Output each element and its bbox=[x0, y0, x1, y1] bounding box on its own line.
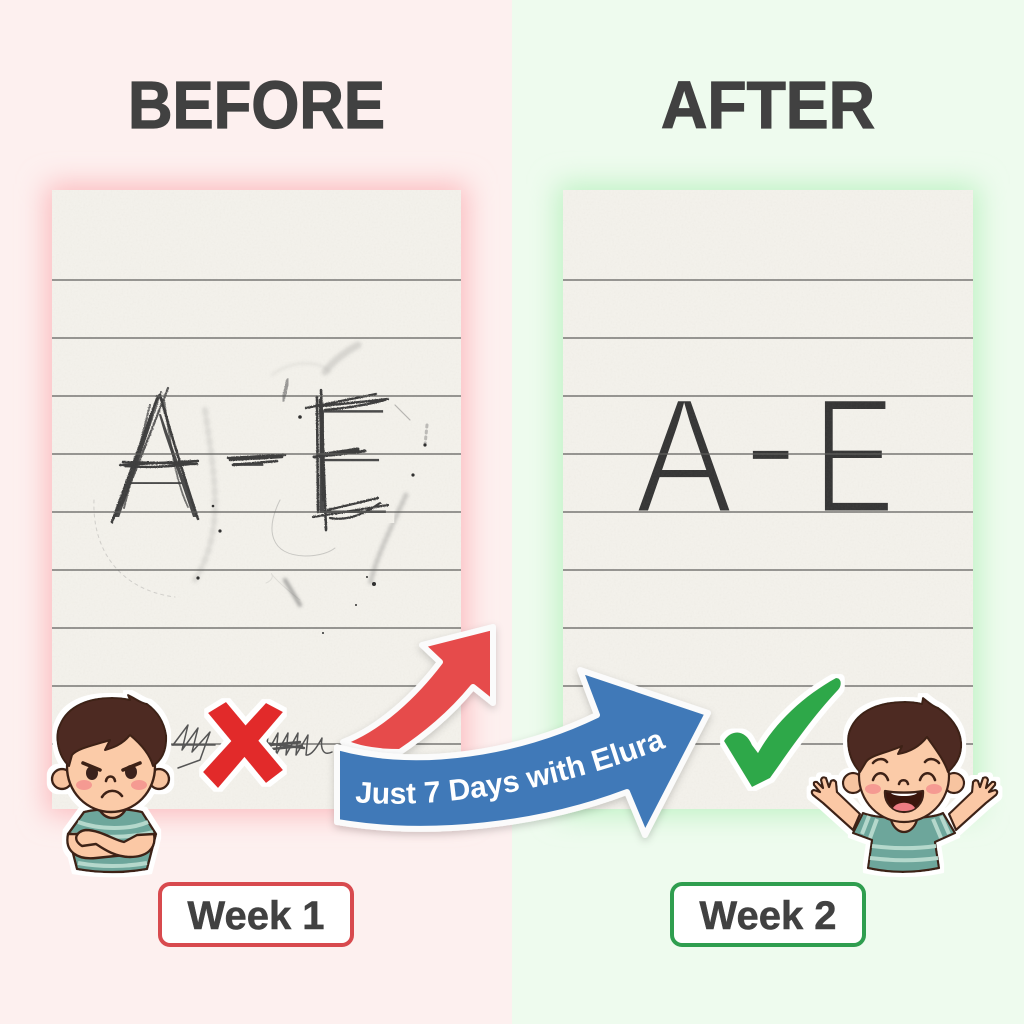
panel: after background bbox=[512, 0, 1024, 1024]
eraser traces bbox=[94, 380, 427, 600]
panel: after paper bbox=[563, 190, 973, 809]
paper grain bbox=[563, 190, 973, 809]
neck bbox=[891, 820, 917, 832]
cheeks bbox=[865, 784, 942, 794]
crossed arms bbox=[67, 834, 127, 858]
panel: before background bbox=[0, 0, 512, 1024]
face bbox=[859, 730, 949, 822]
face bbox=[67, 722, 155, 812]
ruled lines bbox=[563, 280, 973, 744]
handwriting: neat A-E: E bbox=[813, 364, 895, 549]
ruled lines bbox=[52, 280, 461, 744]
eyes bbox=[86, 765, 137, 780]
teeth bbox=[891, 793, 917, 796]
label: week 2 bbox=[672, 884, 864, 945]
cheeks bbox=[76, 780, 147, 790]
smiling eyes, brows, nose bbox=[873, 759, 939, 784]
boy: grumpy with crossed arms bbox=[52, 695, 169, 872]
heading: after: AFTER bbox=[661, 68, 875, 143]
left arm and hand bbox=[812, 777, 860, 830]
handwriting: messy A-E: A bbox=[108, 374, 205, 557]
handwriting: neat A-E: - bbox=[743, 350, 798, 535]
shirt bbox=[853, 813, 955, 872]
handwriting: neat A-E: A bbox=[635, 364, 733, 549]
soft smudges bbox=[195, 345, 406, 605]
shirt stripes bbox=[72, 822, 153, 866]
ears bbox=[843, 773, 964, 793]
smudge specks bbox=[196, 415, 427, 634]
arrow label: Just 7 Days with Elura bbox=[356, 734, 666, 804]
panel: before paper bbox=[52, 190, 461, 809]
arrow: red upward arrow bbox=[343, 627, 493, 752]
icon: green check mark bbox=[724, 678, 841, 787]
open mouth bbox=[885, 791, 923, 812]
label: week 2: Week 2 bbox=[699, 894, 837, 938]
label: week 1 bbox=[160, 884, 352, 945]
red glow around before page bbox=[46, 184, 467, 815]
shirt bbox=[68, 809, 156, 872]
pencil scribble over the letters bbox=[112, 388, 388, 530]
boy: happy with raised arms bbox=[812, 698, 997, 872]
heading: before: BEFORE bbox=[128, 68, 385, 143]
handwriting: messy A-E: - bbox=[221, 360, 276, 543]
neck bbox=[98, 806, 127, 818]
hair bbox=[848, 698, 961, 772]
label: week 1: Week 1 bbox=[187, 894, 325, 938]
nose and frown bbox=[102, 776, 122, 797]
shirt stripes bbox=[862, 816, 949, 860]
angry brows bbox=[83, 763, 140, 770]
ears bbox=[52, 769, 169, 789]
hair bbox=[57, 695, 166, 766]
handwriting: messy A-E: E bbox=[304, 370, 396, 553]
scribbled-out handwriting sample bbox=[172, 725, 332, 768]
right arm and hand bbox=[949, 777, 997, 830]
paper grain bbox=[52, 190, 461, 809]
icon: red X bbox=[203, 702, 283, 788]
arrow: blue banner with label bbox=[330, 667, 713, 842]
green glow around after page bbox=[557, 184, 979, 815]
tongue bbox=[893, 803, 915, 811]
